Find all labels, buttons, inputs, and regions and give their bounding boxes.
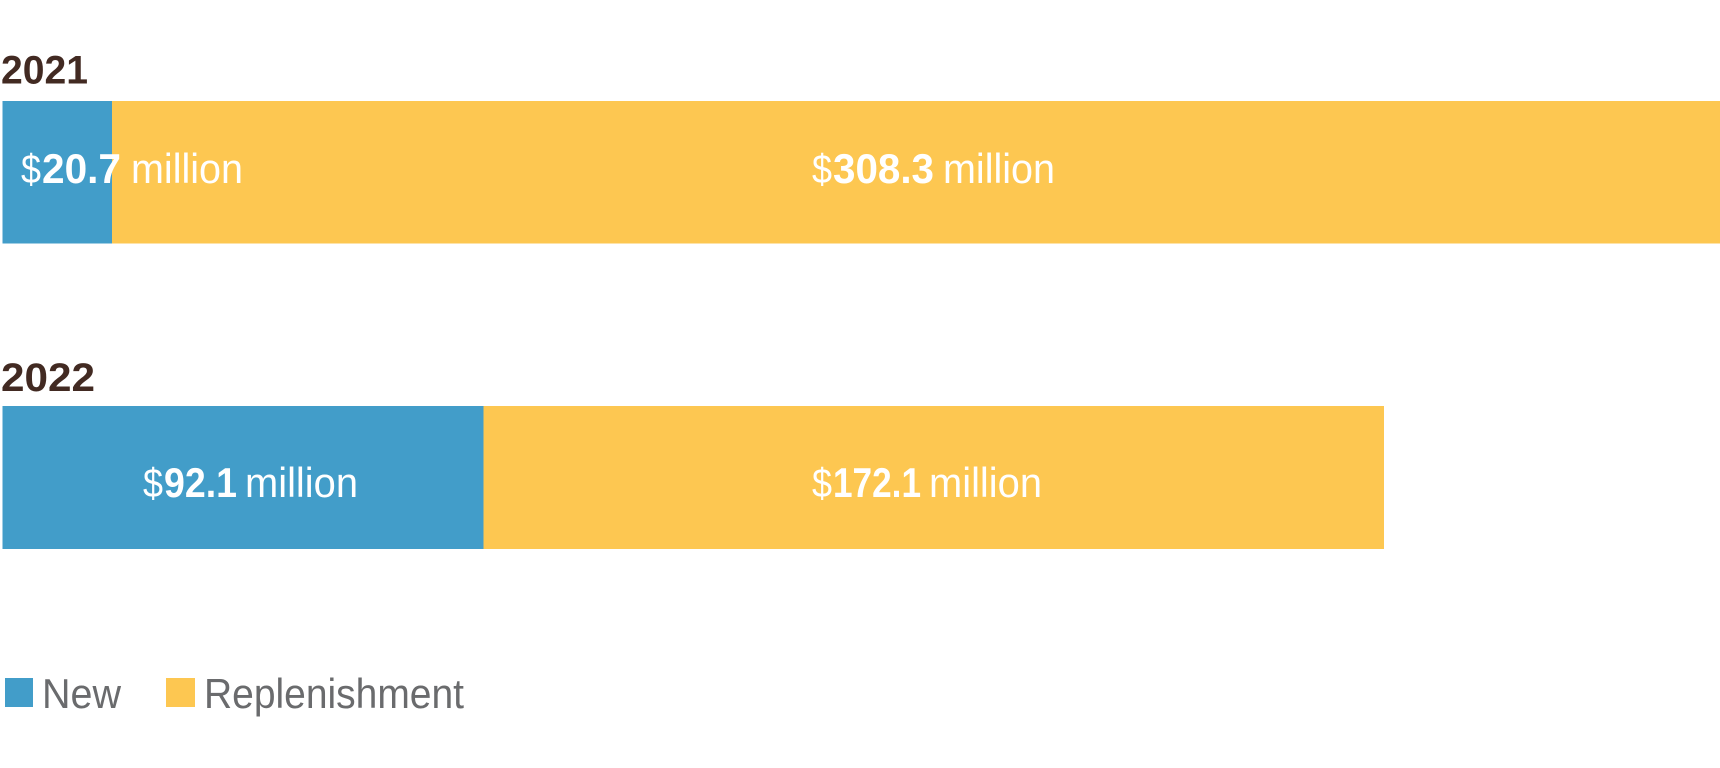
legend swatch: new bbox=[5, 678, 33, 707]
value: 2021 new: $ bbox=[21, 146, 41, 192]
segment: 2021 replenishment bbox=[112, 101, 1720, 244]
value: 2021 replenishment: 308.3 bbox=[833, 145, 934, 192]
value: 2022 new: $ bbox=[143, 460, 163, 506]
heading: 2021: 2021 bbox=[1, 48, 88, 92]
value: 2022 replenishment: $ bbox=[812, 460, 832, 506]
bar: 2022 bbox=[2, 406, 1384, 549]
legend label: replenishment: Replenishment bbox=[204, 670, 464, 717]
value: 2021 new: 20.7 bbox=[42, 145, 121, 192]
segment: 2022 new bbox=[2, 406, 484, 549]
value: 2022 new bbox=[143, 459, 358, 506]
value: 2022 new: million bbox=[245, 459, 358, 506]
value: 2021 new: million bbox=[131, 145, 243, 192]
value: 2022 new: 92.1 bbox=[164, 459, 237, 506]
legend label: new: New bbox=[42, 670, 122, 717]
value: 2022 replenishment: million bbox=[929, 459, 1042, 506]
value: 2021 replenishment: million bbox=[943, 145, 1055, 192]
value: 2021 new bbox=[21, 145, 243, 192]
legend swatch: replenishment bbox=[166, 678, 195, 707]
value: 2021 replenishment: $ bbox=[812, 146, 832, 192]
segment: 2022 replenishment bbox=[484, 406, 1384, 549]
heading: 2022: 2022 bbox=[1, 356, 95, 400]
value: 2022 replenishment: 172.1 bbox=[833, 459, 921, 506]
legend bbox=[5, 670, 464, 717]
value: 2021 replenishment bbox=[812, 145, 1055, 192]
value: 2022 replenishment bbox=[812, 459, 1042, 506]
segment: 2021 new bbox=[2, 101, 112, 244]
bar: 2021 bbox=[2, 101, 1720, 244]
